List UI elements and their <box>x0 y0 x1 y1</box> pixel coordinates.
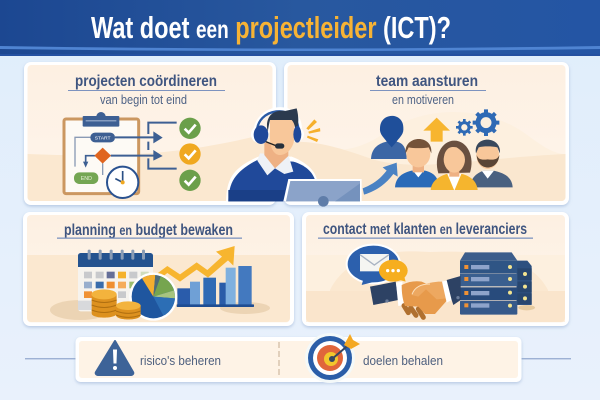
icon: clipboard flowchart <box>64 112 201 198</box>
bar chart <box>177 266 254 307</box>
icon: large gear <box>473 109 499 136</box>
icon: green check <box>179 170 201 191</box>
icon: warning triangle <box>96 341 133 375</box>
panel: planning en budget bewaken <box>23 212 294 326</box>
icon: green check <box>179 118 201 139</box>
illustration: project leader with headset <box>226 108 362 207</box>
icon: small gear <box>456 119 473 136</box>
header band <box>0 0 600 56</box>
title: Wat doet een projectleider (ICT)? <box>91 10 451 45</box>
person: right <box>470 140 513 187</box>
icon: orange check <box>179 143 201 165</box>
icon: server rack <box>460 252 517 315</box>
subheading: van begin tot eind: van begin tot eind <box>100 92 187 107</box>
icon: clipboard flowchart: START <box>95 135 111 141</box>
calendar <box>78 250 153 311</box>
panel: team aansturen <box>284 62 569 205</box>
icon: server rack small <box>517 261 535 310</box>
heading: planning en budget bewaken: planning en budget bewaken <box>64 222 233 239</box>
bottom connector lines <box>25 358 571 359</box>
illustration: budget <box>78 246 254 321</box>
label: risico's beheren: risico's beheren <box>140 353 221 368</box>
icon: handshake <box>370 276 461 317</box>
icon: target with arrow <box>305 333 360 383</box>
laptop <box>283 179 362 207</box>
subheading: en motiveren: en motiveren <box>392 92 454 107</box>
panel: bottom bar <box>76 333 522 383</box>
label: doelen behalen: doelen behalen <box>363 353 443 368</box>
speech bubble: chat <box>379 260 408 282</box>
panel: projecten coördineren <box>24 62 276 205</box>
arrow: to team <box>363 163 398 195</box>
pie chart <box>129 273 177 321</box>
icon: team illustration <box>363 109 513 195</box>
illustration: contact <box>347 245 535 317</box>
heading: contact met klanten en leveranciers: contact met klanten en leveranciers <box>323 221 527 238</box>
arrow: rising trend <box>156 246 235 282</box>
person: middle <box>431 141 478 191</box>
icon: clipboard flowchart: END <box>81 176 92 182</box>
speech bubble: mail <box>347 245 400 285</box>
icon: clock <box>107 167 138 198</box>
coins <box>91 289 141 319</box>
person: left <box>395 139 439 187</box>
heading: projecten coördineren: projecten coördineren <box>75 73 217 90</box>
heading: team aansturen: team aansturen <box>376 73 478 90</box>
panel: contact met klanten en leveranciers <box>302 212 569 326</box>
